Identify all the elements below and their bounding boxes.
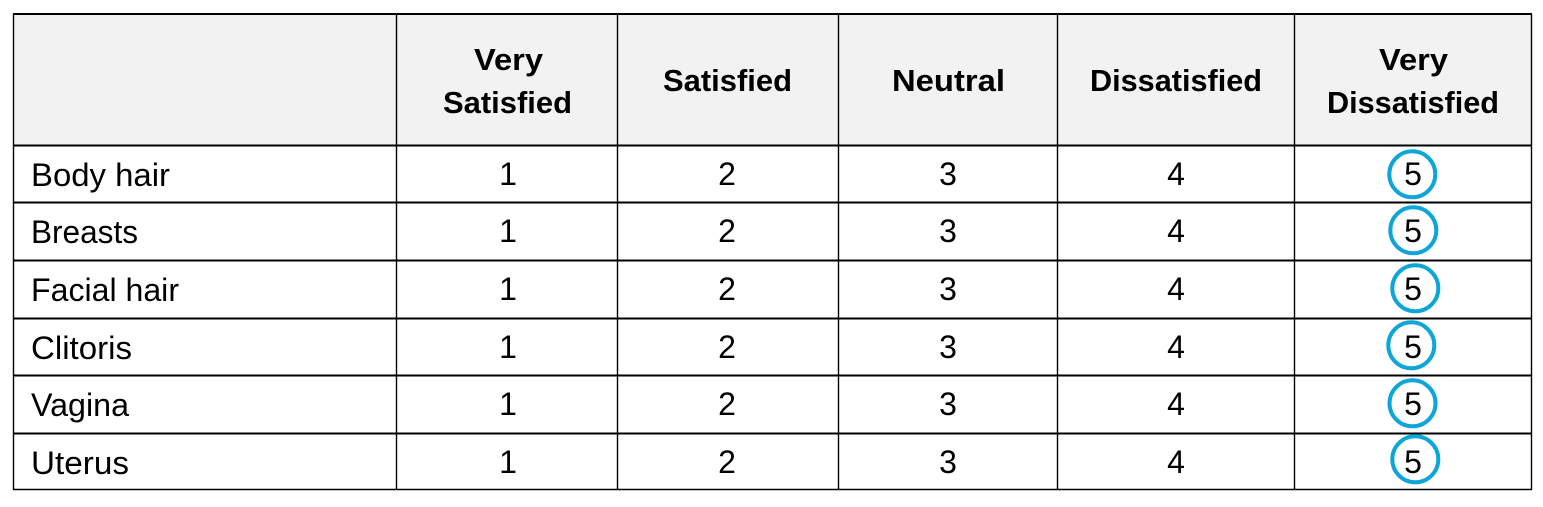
row labels: Facial hair <box>31 272 179 308</box>
rating numbers: 5 <box>1404 386 1422 422</box>
rating numbers: 3 <box>939 271 957 307</box>
rating numbers: 5 <box>1404 271 1422 307</box>
row labels: Vagina <box>31 387 129 423</box>
column headers: Neutral <box>892 63 1005 98</box>
column headers <box>443 42 1499 120</box>
rating numbers: 2 <box>718 444 736 480</box>
blue circles around very dissatisfied ratings <box>1388 151 1438 482</box>
rating numbers: 4 <box>1167 156 1185 192</box>
column headers: Dissatisfied <box>1327 85 1499 120</box>
rating numbers: 5 <box>1404 444 1422 480</box>
column headers: Dissatisfied <box>1090 63 1262 98</box>
rating numbers: 1 <box>499 156 517 192</box>
rating numbers: 5 <box>1404 156 1422 192</box>
rating numbers: 3 <box>939 329 957 365</box>
rating numbers: 4 <box>1167 329 1185 365</box>
rating numbers: 1 <box>499 444 517 480</box>
column headers: Satisfied <box>443 85 572 120</box>
rating numbers: 1 <box>499 213 517 249</box>
column headers: Very <box>1379 42 1449 77</box>
rating numbers <box>499 156 1422 480</box>
rating numbers: 4 <box>1167 386 1185 422</box>
rating numbers: 4 <box>1167 213 1185 249</box>
rating numbers: 2 <box>718 271 736 307</box>
rating numbers: 5 <box>1404 213 1422 249</box>
row labels: Breasts <box>31 214 138 250</box>
header row background <box>14 14 1531 145</box>
rating numbers: 3 <box>939 213 957 249</box>
rating numbers: 5 <box>1404 329 1422 365</box>
rating numbers: 4 <box>1167 444 1185 480</box>
row labels <box>31 157 179 481</box>
column headers: Very <box>474 42 544 77</box>
rating numbers: 1 <box>499 386 517 422</box>
rating numbers: 3 <box>939 156 957 192</box>
rating numbers: 3 <box>939 444 957 480</box>
rating numbers: 4 <box>1167 271 1185 307</box>
rating numbers: 1 <box>499 329 517 365</box>
rating numbers: 3 <box>939 386 957 422</box>
column headers: Satisfied <box>663 63 792 98</box>
row labels: Body hair <box>31 157 170 193</box>
rating numbers: 2 <box>718 329 736 365</box>
rating numbers: 2 <box>718 386 736 422</box>
row labels: Clitoris <box>31 330 132 366</box>
row labels: Uterus <box>31 445 129 481</box>
rating numbers: 1 <box>499 271 517 307</box>
rating numbers: 2 <box>718 156 736 192</box>
rating numbers: 2 <box>718 213 736 249</box>
